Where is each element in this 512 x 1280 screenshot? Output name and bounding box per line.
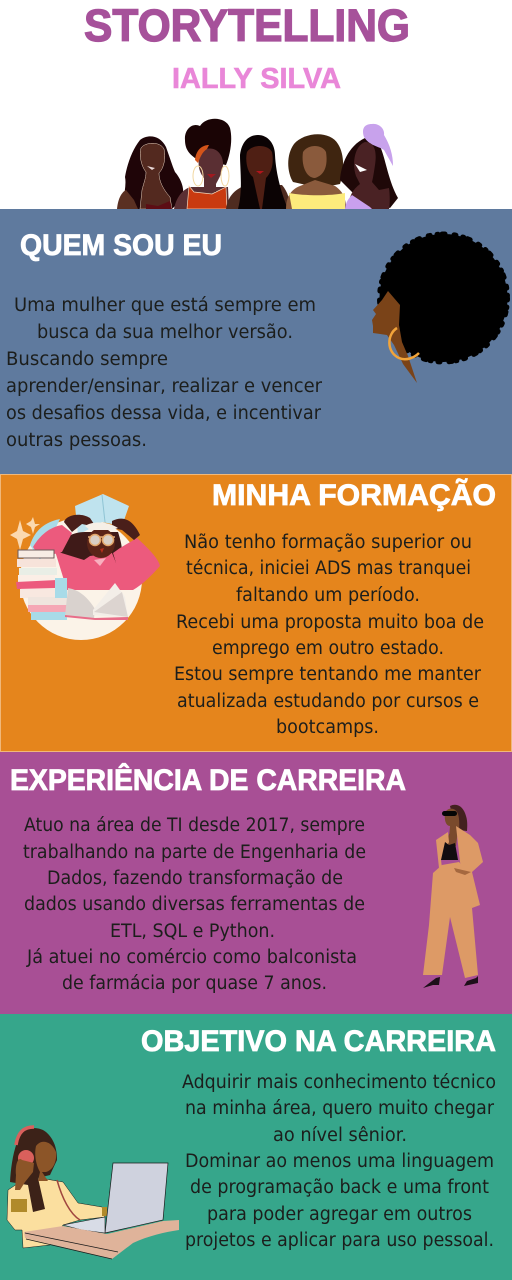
text block: Não tenho formação superior ou	[184, 532, 472, 553]
icon: woman at laptop with headset	[7, 1127, 179, 1259]
text block: ao nível sênior.	[273, 1125, 407, 1146]
panel: experiência de carreira	[0, 752, 512, 1014]
woman 2	[174, 119, 231, 209]
books stack	[16, 550, 68, 620]
text block	[23, 815, 366, 994]
text block: projetos e aplicar para uso pessoal.	[185, 1230, 494, 1251]
text block: faltando um período.	[236, 585, 420, 606]
open book	[65, 583, 128, 620]
text block: Dominar ao menos uma linguagem	[185, 1151, 494, 1172]
text block: para poder agregar em outros	[207, 1204, 472, 1225]
text block: atualizada estudando por cursos e	[177, 691, 479, 712]
text block: ETL, SQL e Python.	[110, 921, 275, 942]
text block: Dados, fazendo transformação de	[47, 868, 343, 889]
sparkles	[10, 520, 31, 550]
text block: outras pessoas.	[6, 430, 147, 451]
text block: trabalhando na parte de Engenharia de	[23, 842, 366, 863]
text block: Atuo na área de TI desde 2017, sempre	[24, 815, 365, 836]
text block: os desafios dessa vida, e incentivar	[6, 403, 321, 424]
woman 5	[340, 124, 398, 209]
panel: objetivo na carreira	[0, 1014, 512, 1280]
icon: woman in peach suit	[423, 805, 483, 988]
author name: IALLY SILVA	[172, 63, 341, 95]
heading: OBJETIVO NA CARREIRA	[141, 1025, 496, 1058]
title: STORYTELLING	[84, 0, 410, 51]
text block: aprender/ensinar, realizar e vencer	[6, 376, 322, 397]
illustration: five women	[117, 119, 398, 209]
woman 3	[226, 135, 290, 209]
heading: EXPERIÊNCIA DE CARREIRA	[10, 763, 406, 797]
text block	[182, 1072, 496, 1251]
text block: dados usando diversas ferramentas de	[24, 894, 365, 915]
text block: técnica, iniciei ADS mas tranquei	[186, 558, 471, 579]
text block: emprego em outro estado.	[212, 638, 444, 659]
text block: busca da sua melhor versão.	[37, 322, 293, 343]
heading: QUEM SOU EU	[20, 229, 222, 262]
text block	[174, 532, 484, 738]
text block: bootcamps.	[276, 717, 379, 738]
woman 4	[286, 134, 346, 209]
heading: MINHA FORMAÇÃO	[212, 478, 496, 512]
icon: woman with afro in profile	[372, 234, 508, 383]
icon: woman overwhelmed by books	[10, 494, 160, 640]
text block: de programação back e uma front	[190, 1177, 489, 1198]
laptop	[105, 1163, 168, 1233]
panel: minha formação	[0, 474, 512, 752]
text block: Adquirir mais conhecimento técnico	[182, 1072, 496, 1093]
desk	[24, 1220, 179, 1259]
text block: Recebi uma proposta muito boa de	[176, 612, 484, 633]
torso and arms	[33, 525, 160, 590]
text block	[6, 295, 322, 451]
panel: quem sou eu	[0, 209, 512, 474]
text block: Estou sempre tentando me manter	[174, 664, 481, 685]
text block: Já atuei no comércio como balconista	[26, 947, 357, 968]
text block: na minha área, quero muito chegar	[185, 1098, 494, 1119]
text block: Uma mulher que está sempre em	[14, 295, 316, 316]
text block: de farmácia por quase 7 anos.	[62, 973, 327, 994]
woman 1	[117, 136, 183, 209]
text block: Buscando sempre	[6, 349, 168, 370]
